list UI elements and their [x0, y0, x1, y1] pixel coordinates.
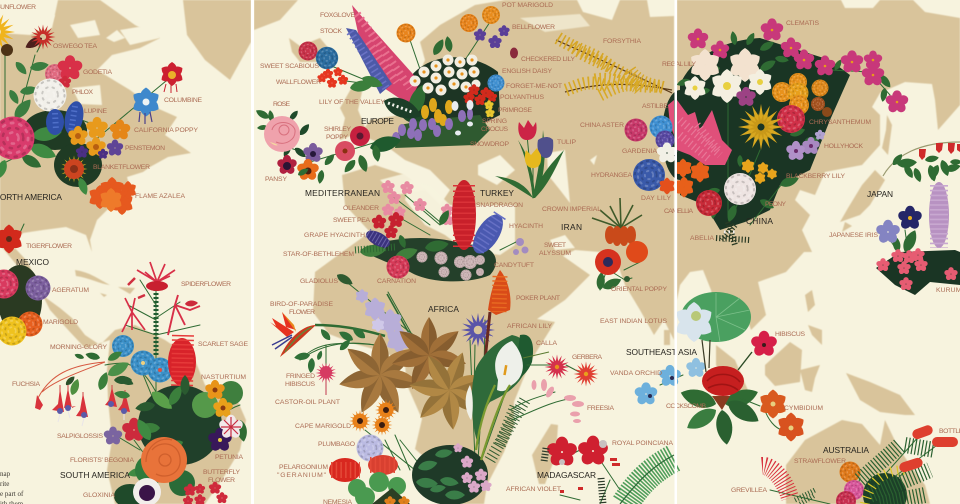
flower: freesia	[510, 379, 584, 423]
flower: shirley poppy	[335, 126, 370, 161]
label: day lily: DAY LILY	[641, 195, 671, 202]
flower: oleander	[381, 180, 454, 226]
flower: strawflower	[836, 462, 864, 504]
flower: nemesia	[384, 496, 410, 504]
label: china aster: CHINA ASTER	[580, 122, 624, 129]
label: gerbera: GERBERA	[572, 354, 602, 361]
flower: purple blossom	[735, 87, 757, 108]
flower: clematis	[687, 18, 910, 114]
label: flower: FLOWER	[208, 477, 235, 484]
flower: pot marigold	[396, 6, 500, 42]
label: cymbidium: CYMBIDIUM	[784, 405, 823, 412]
flower: bellflower	[473, 25, 510, 49]
bouquet: Mediterranean	[355, 180, 528, 281]
flower: spiderflower	[122, 262, 200, 355]
page gutters between map panels	[251, 0, 677, 504]
flower: grevillea	[762, 466, 815, 504]
label: english daisy: ENGLISH DAISY	[502, 68, 552, 75]
flower: penstemon	[75, 140, 124, 160]
label: astilbe: ASTILBE	[642, 103, 668, 110]
bouquet: China	[673, 18, 910, 245]
label: plumbago: PLUMBAGO	[318, 441, 355, 448]
label: star-of-bethlehem: STAR-OF-BETHLEHEM	[283, 251, 354, 258]
flower: oswego tea	[20, 14, 66, 60]
label: grape hyacinth: GRAPE HYACINTH	[304, 232, 365, 239]
leaves: pelargonium foliage	[348, 472, 410, 504]
leaves: South America foliage	[96, 349, 249, 452]
label: blanketflower: BLANKETFLOWER	[93, 164, 150, 171]
label: salpiglossis: SALPIGLOSSIS	[57, 433, 103, 440]
label: cape marigold: CAPE MARIGOLD	[295, 423, 351, 430]
label: gladiolus: GLADIOLUS	[300, 278, 338, 285]
label: poker plant: POKER PLANT	[516, 295, 560, 302]
flower: cape marigold	[340, 390, 406, 444]
label: regal lily: REGAL LILY	[662, 61, 696, 68]
label: scarlet sage: SCARLET SAGE	[198, 341, 248, 348]
plant: dark fern sprig	[544, 448, 603, 504]
bouquet: Australia	[762, 424, 958, 504]
flower: fringed hibiscus	[307, 354, 345, 395]
flower: pansy	[276, 143, 324, 182]
label: ageratum: AGERATUM	[52, 287, 89, 294]
flower: florists' begonia	[127, 417, 197, 499]
label: rose: ROSE	[273, 101, 290, 108]
flower: snapdragon	[452, 180, 476, 250]
flower: tulip	[495, 120, 564, 198]
label: madagascar: MADAGASCAR	[537, 470, 596, 480]
flower: hibiscus	[738, 331, 778, 370]
label: china: CHINA	[746, 216, 773, 226]
flower: pelargonium geranium	[329, 435, 410, 482]
flower: lily of the valley	[381, 93, 424, 124]
flower: flame azalea	[87, 177, 137, 215]
label: wallflower: WALLFLOWER	[276, 79, 321, 86]
leaves: rose and poppy spray	[297, 133, 403, 184]
leaves: China foliage	[676, 31, 893, 223]
label: castor-oil plant: CASTOR-OIL PLANT	[275, 399, 340, 406]
plant: castor-oil plant	[337, 317, 501, 441]
leaves: Europe foliage	[349, 36, 454, 127]
label: lily of the valley: LILY OF THE VALLEY	[319, 99, 385, 106]
label: gloxinia: GLOXINIA	[83, 492, 115, 499]
flower: stock	[346, 28, 392, 94]
flower: polyanthus	[463, 84, 498, 106]
flower: nasturtium	[192, 380, 243, 419]
flower: royal poinciana	[545, 436, 610, 468]
flower: small red buds	[560, 458, 620, 493]
flower: english daisy	[410, 54, 480, 96]
flower: carnation	[386, 256, 410, 278]
label: hollyhock: HOLLYHOCK	[824, 143, 863, 150]
bouquet: Japan	[875, 142, 960, 295]
flower: scarlet sage	[168, 335, 196, 388]
flower: petunia	[207, 415, 244, 453]
flower: pink pompom	[0, 270, 18, 298]
flower: day lily	[673, 158, 711, 198]
label: pansy: PANSY	[265, 176, 287, 183]
flower: red columbine	[159, 62, 185, 93]
flower: blackberry lily	[741, 159, 778, 184]
label: shirley: SHIRLEY	[324, 126, 351, 133]
flower: regal lily	[682, 48, 774, 103]
text block: body copy	[0, 470, 24, 504]
flower: wallflower	[317, 67, 349, 89]
leaves: fringed hibiscus spray	[294, 325, 389, 373]
flower: plumbago	[356, 434, 384, 462]
flower: african lily	[447, 299, 509, 395]
plant: bottlebrush foliage	[860, 445, 935, 504]
label: freesia: FREESIA	[587, 405, 614, 412]
label: spiderflower: SPIDERFLOWER	[181, 281, 231, 288]
label: oleander: OLEANDER	[343, 205, 379, 212]
flower: california poppy	[67, 117, 131, 158]
flower: oriental poppy	[595, 241, 648, 292]
label: penstemon: PENSTEMON	[125, 145, 165, 152]
label: african violet: AFRICAN VIOLET	[506, 486, 561, 493]
flower: phlox	[34, 78, 66, 112]
bouquet: right panel left edge, garden flowers	[624, 90, 698, 194]
label: california poppy: CALIFORNIA POPPY	[134, 127, 198, 134]
flower: butterfly flower	[182, 482, 228, 504]
label: flower: FLOWER	[289, 309, 315, 316]
label: hibiscus: HIBISCUS	[775, 331, 805, 338]
label: vanda orchid: VANDA ORCHID	[610, 370, 662, 377]
label: alyssum: ALYSSUM	[539, 250, 571, 257]
label: oswego tea: OSWEGO TEA	[53, 43, 97, 50]
label: hyacinth: HYACINTH	[509, 223, 543, 230]
label: tigerflower: TIGERFLOWER	[26, 243, 72, 250]
flower: foxglove	[352, 5, 420, 104]
flower: japanese iris	[875, 206, 923, 254]
bouquet: Europe	[254, 5, 518, 184]
flower: gardenia	[656, 142, 678, 164]
label: iran: IRAN	[561, 222, 582, 232]
flower: abelia	[716, 222, 750, 245]
flower: forget-me-not	[488, 74, 504, 92]
flower: bottlebrush	[898, 424, 958, 473]
flower: salpiglossis	[103, 418, 147, 455]
label: sweet: SWEET	[544, 242, 566, 249]
bouquet: South America	[35, 262, 249, 504]
label: bird-of-paradise: BIRD-OF-PARADISE	[270, 301, 333, 308]
flower: sunflower	[0, 0, 31, 67]
label: crown imperial: CROWN IMPERIAL	[542, 206, 601, 213]
flower: morning-glory	[112, 335, 172, 382]
leaves: Mediterranean foliage	[355, 208, 452, 263]
flower: gloxinia	[114, 478, 161, 504]
flower: candytuft	[416, 252, 485, 280]
label: butterfly: BUTTERFLY	[203, 469, 240, 476]
flower: sweet pea	[371, 212, 405, 239]
label: mexico: MEXICO	[16, 257, 49, 267]
label: abelia: ABELIA	[690, 235, 714, 242]
label: fuchsia: FUCHSIA	[12, 381, 40, 388]
plant: wisteria	[883, 142, 960, 248]
label: hibiscus: HIBISCUS	[285, 381, 315, 388]
flower: spring crocus	[392, 98, 490, 148]
flower: day lily edge	[658, 178, 676, 194]
flower: gladiolus	[335, 271, 413, 354]
label: african lily: AFRICAN LILY	[507, 323, 552, 330]
label: calla: CALLA	[536, 340, 557, 347]
label: carnation: CARNATION	[377, 278, 416, 285]
label: chrysanthemum: CHRYSANTHEMUM	[809, 119, 871, 126]
label: mediterranean: MEDITERRANEAN	[305, 188, 380, 198]
label: strawflower: STRAWFLOWER	[794, 458, 846, 465]
label: east indian lotus: EAST INDIAN LOTUS	[600, 318, 667, 325]
map: inland seas	[20, 14, 597, 255]
flower: cymbidium	[740, 390, 806, 442]
flower: astilbe edge	[668, 100, 674, 135]
plant: african violet	[412, 443, 492, 504]
label: australia: AUSTRALIA	[823, 445, 869, 455]
label: pelargonium: PELARGONIUM	[279, 464, 328, 471]
label: stock: STOCK	[320, 28, 342, 35]
bouquet: Africa	[270, 270, 609, 504]
flower: grape hyacinth	[363, 227, 393, 251]
bouquet: North America	[0, 0, 185, 215]
label: foxglove: FOXGLOVE	[320, 12, 355, 19]
label: sweet scabious: SWEET SCABIOUS	[260, 63, 319, 70]
label: camellia: CAMELLIA	[664, 208, 693, 215]
flower: vanda orchid	[633, 358, 707, 406]
label: royal poinciana: ROYAL POINCIANA	[612, 440, 673, 447]
label: tulip: TULIP	[557, 139, 576, 146]
label: candytuft: CANDYTUFT	[494, 262, 534, 269]
plant: lotus leaf	[681, 292, 751, 342]
label: southeast asia: SOUTHEAST ASIA	[626, 347, 697, 357]
label: petunia: PETUNIA	[215, 454, 243, 461]
label: europe: EUROPE	[361, 116, 394, 126]
label: crocus: CROCUS	[481, 126, 508, 133]
flower: hyacinth	[467, 210, 509, 258]
flower: china aster	[624, 118, 648, 142]
bouquet: Southeast Asia	[673, 292, 806, 446]
label: snapdragon: SNAPDRAGON	[476, 202, 523, 209]
plant: fern	[620, 455, 674, 504]
flower: hydrangea	[633, 159, 665, 191]
label: blackberry lily: BLACKBERRY LILY	[786, 173, 845, 180]
label: checkered lily: CHECKERED LILY	[521, 56, 575, 63]
label: poppy: POPPY	[326, 134, 348, 141]
flower: poker plant	[484, 270, 511, 370]
flower: lotus	[673, 302, 715, 372]
label: turkey: TURKEY	[480, 188, 514, 198]
flower: fuchsia	[35, 351, 130, 426]
flower: gerbera	[527, 344, 609, 397]
label: flame azalea: FLAME AZALEA	[135, 193, 185, 200]
flower: tigerflower	[0, 224, 24, 254]
label: geranium: "GERANIUM"	[277, 472, 327, 479]
flower: cockscomb	[678, 366, 763, 446]
label: oriental poppy: ORIENTAL POPPY	[611, 286, 667, 293]
label: spring: SPRING	[482, 118, 507, 125]
label: florists' begonia: FLORISTS' BEGONIA	[70, 457, 134, 464]
label: polyanthus: POLYANTHUS	[500, 94, 544, 101]
label: snowdrop: SNOWDROP	[470, 141, 509, 148]
flower: forsythia	[556, 38, 672, 95]
flower: blue columbine	[131, 88, 161, 124]
flower: camellia	[696, 190, 722, 216]
label: forsythia: FORSYTHIA	[603, 38, 641, 45]
flower: hollyhock	[785, 130, 826, 162]
flower: ageratum	[26, 276, 50, 300]
flower: rose	[254, 108, 311, 159]
text block: body copy: e part of	[0, 490, 24, 498]
flower: small lilac spray	[513, 238, 528, 255]
text block: body copy: rite	[0, 480, 9, 488]
label: godetia: GODETIA	[83, 69, 112, 76]
flower: marigold	[0, 312, 42, 346]
flower: calla	[466, 335, 549, 460]
label: fringed: FRINGED	[286, 373, 315, 380]
label: south america: SOUTH AMERICA	[60, 470, 130, 480]
flower: lupine	[46, 100, 86, 136]
flower: checkered lily	[510, 48, 518, 58]
plant: kurume azalea	[876, 248, 960, 295]
label: sweet pea: SWEET PEA	[333, 217, 370, 224]
flower: crown imperial	[592, 198, 642, 246]
label: primrose: PRIMROSE	[498, 107, 532, 114]
flower: bird-of-paradise	[270, 312, 316, 357]
label: japan: JAPAN	[867, 189, 893, 199]
label: grevillea: GREVILLEA	[731, 487, 767, 494]
label: hydrangea: HYDRANGEA	[591, 172, 632, 179]
label: lupine: LUPINE	[84, 108, 107, 115]
label: morning-glory: MORNING-GLORY	[50, 344, 107, 351]
label: pot marigold: POT MARIGOLD	[502, 2, 553, 9]
flower: primrose	[484, 100, 495, 118]
flower: purple aster	[656, 130, 674, 150]
label: bellflower: BELLFLOWER	[512, 24, 555, 31]
label: forget-me-not: FORGET-ME-NOT	[506, 83, 562, 90]
bouquet: Madagascar	[544, 436, 674, 504]
label: japanese iris: JAPANESE IRIS	[829, 232, 878, 239]
text block: body copy: nap	[0, 470, 11, 478]
flower: peony	[724, 173, 756, 205]
label: marigold: MARIGOLD	[43, 319, 78, 326]
label: nasturtium: NASTURTIUM	[201, 374, 246, 381]
label: columbine: COLUMBINE	[164, 97, 202, 104]
flower: chrysanthemum	[719, 73, 832, 169]
label: phlox: PHLOX	[72, 89, 93, 96]
label: clematis: CLEMATIS	[786, 20, 819, 27]
label: cockscomb: COCKSCOMB	[666, 403, 706, 410]
flower: sweet scabious	[298, 42, 338, 69]
label: gardenia: GARDENIA	[622, 148, 657, 155]
label: peony: PEONY	[765, 201, 786, 208]
bouquet: Mexico	[0, 224, 50, 346]
flower: astilbe	[677, 100, 732, 165]
flower: godetia	[45, 55, 84, 89]
flower: rhododendron	[0, 116, 34, 160]
flower: blanketflower	[49, 144, 99, 194]
label: africa: AFRICA	[428, 304, 459, 314]
flower: blue aster	[650, 116, 672, 138]
